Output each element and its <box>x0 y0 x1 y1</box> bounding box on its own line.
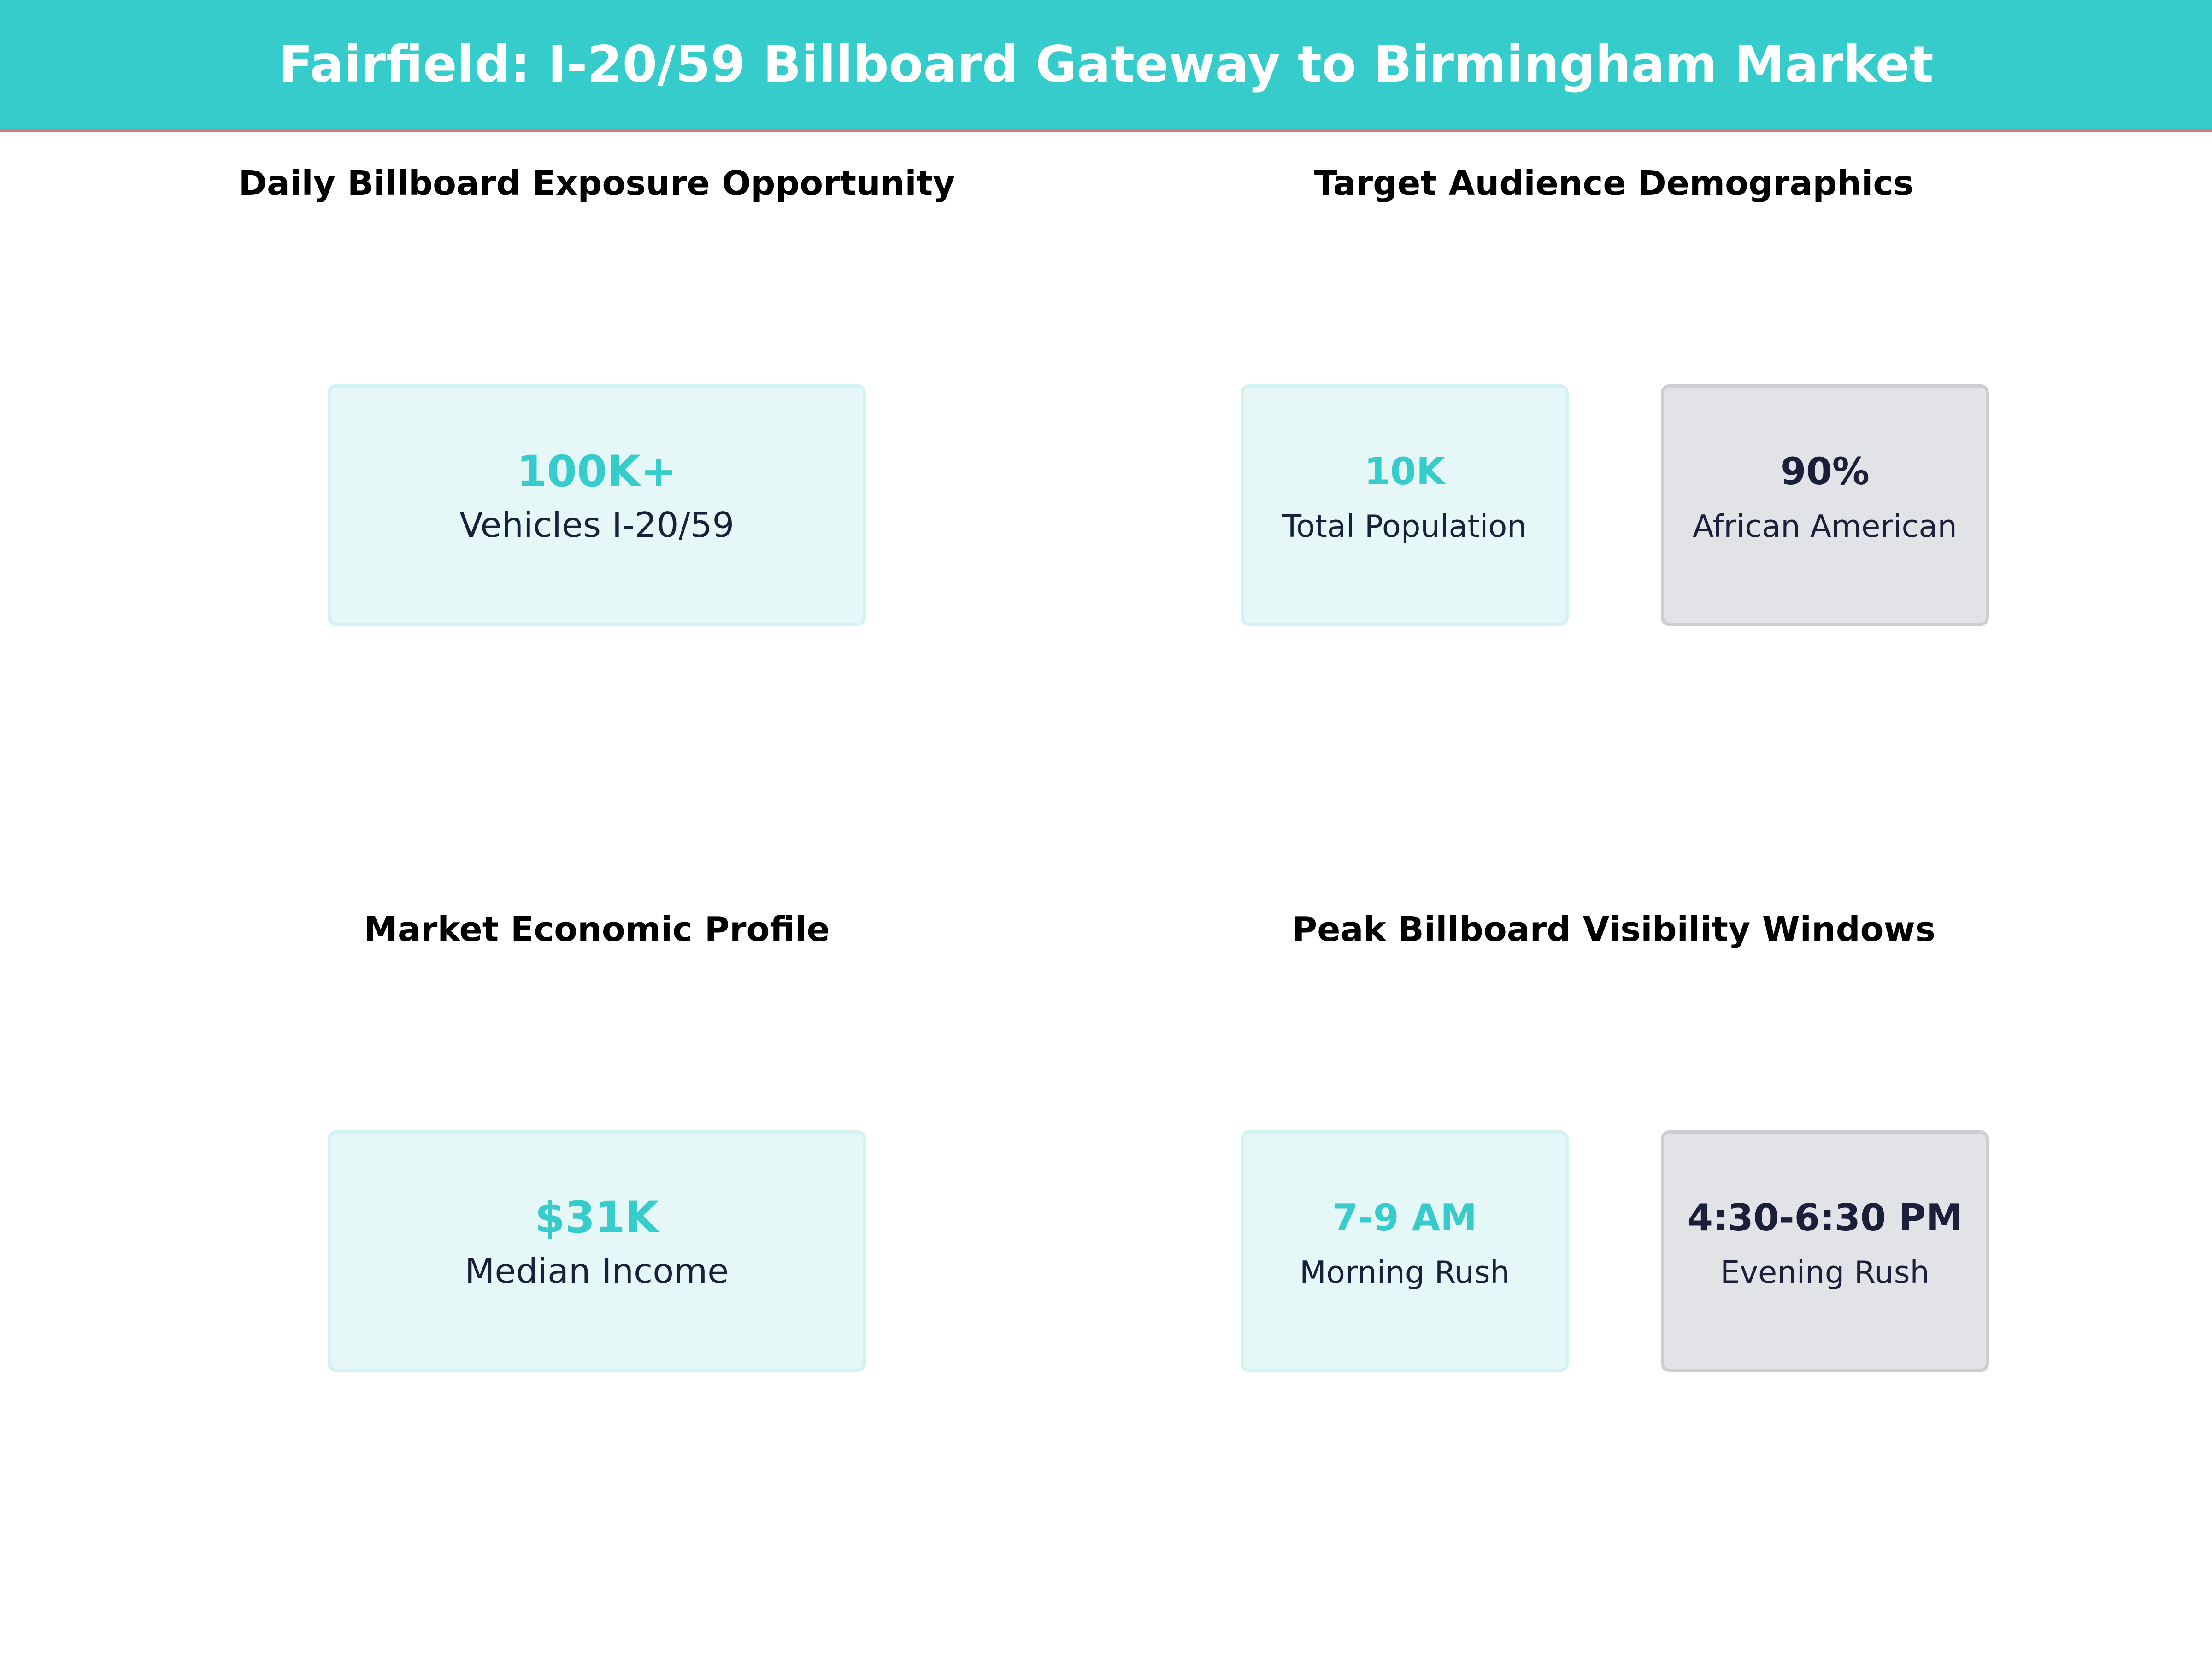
heading: demographics: Target Audience Demographics <box>1314 164 1913 203</box>
heading: visibility windows: Peak Billboard Visibility Windows <box>1292 910 1936 949</box>
heading: economic profile: Market Economic Profile <box>364 910 830 949</box>
stat: 4:30-6:30 PM: 4:30-6:30 PM <box>1687 1196 1963 1239</box>
stat: 100K+: 100K+ <box>517 447 677 497</box>
stat: 10K: 10K <box>1364 450 1445 494</box>
label: median income: Median Income <box>465 1251 729 1291</box>
stat: 90%: 90% <box>1780 450 1870 494</box>
label: morning rush: Morning Rush <box>1300 1254 1510 1290</box>
label: population: Total Population <box>1282 508 1527 544</box>
card: median income <box>328 1130 866 1372</box>
card: evening rush <box>1661 1130 1989 1372</box>
heading: daily exposure: Daily Billboard Exposure Opportunity <box>239 164 955 203</box>
label: african american: African American <box>1693 508 1957 544</box>
stat: 7-9 AM: 7-9 AM <box>1332 1196 1477 1239</box>
card: population <box>1241 384 1569 626</box>
card: vehicles <box>328 384 866 626</box>
card: morning rush <box>1241 1130 1569 1372</box>
title: Fairfield: I-20/59 Billboard Gateway to Birmingham Market <box>278 35 1934 94</box>
label: vehicles: Vehicles I-20/59 <box>459 505 734 545</box>
header banner <box>0 0 2212 132</box>
stat: $31K: $31K <box>535 1193 659 1243</box>
card: african american <box>1661 384 1989 626</box>
label: evening rush: Evening Rush <box>1720 1254 1930 1290</box>
